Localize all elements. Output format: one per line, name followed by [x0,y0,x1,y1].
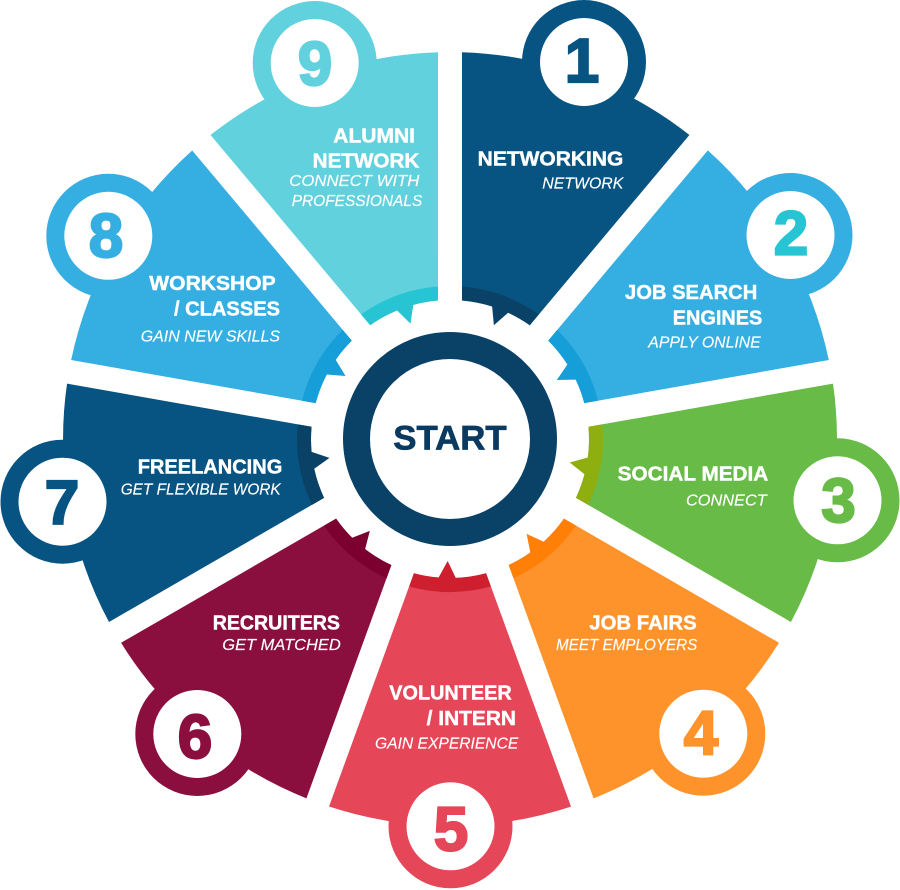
panel: segment 9 alumni network: 9 [298,30,332,99]
panel: segment 5 volunteer intern: / INTERN [427,708,516,730]
panel: segment 9 alumni network [211,0,560,344]
panel: segment 8 workshop classes [46,136,380,407]
panel: segment 1 networking: 1 [565,27,599,96]
center start ring: START [393,419,507,457]
panel: segment 1 networking: NETWORKING [478,149,623,171]
panel: segment 4 job fairs: 4 [684,699,719,768]
panel: segment 4 job fairs: JOB FAIRS [589,612,697,634]
panel: segment 7 freelancing [0,289,345,622]
panel: segment 8 workshop classes: 8 [89,202,123,271]
panel: segment 6 recruiters: 6 [178,703,212,772]
panel: segment 2 job search engines: JOB SEARCH [625,282,757,304]
panel: segment 4 job fairs: MEET EMPLOYERS [556,637,698,654]
panel: segment 7 freelancing: GET FLEXIBLE WORK [121,481,282,498]
panel: segment 6 recruiters: GET MATCHED [222,637,341,654]
panel: segment 1 networking [462,0,689,325]
panel: segment 5 volunteer intern: VOLUNTEER [389,682,512,704]
panel: segment 3 social media [564,384,900,655]
center start ring [356,346,544,532]
panel: segment 9 alumni network: NETWORK [313,151,420,173]
panel: segment 2 job search engines: ENGINES [673,307,762,329]
panel: segment 8 workshop classes: WORKSHOP [149,273,276,295]
panel: segment 9 alumni network: CONNECT WITH [289,173,420,190]
panel: segment 2 job search engines: 2 [774,200,808,269]
panel: segment 8 workshop classes: / CLASSES [174,299,280,321]
panel: segment 2 job search engines [532,150,882,506]
panel: segment 7 freelancing: FREELANCING [138,456,282,478]
panel: segment 6 recruiters [93,464,400,798]
panel: segment 8 workshop classes: GAIN NEW SKILLS [141,329,280,346]
panel: segment 7 freelancing: 7 [45,469,79,538]
panel: segment 5 volunteer intern: 5 [434,796,468,865]
panel: segment 1 networking: NETWORK [542,175,625,192]
panel: segment 6 recruiters: RECRUITERS [213,612,340,634]
panel: segment 4 job fairs [429,506,779,840]
panel: segment 5 volunteer intern: GAIN EXPERIENCE [375,735,519,752]
panel: segment 5 volunteer intern [264,550,571,888]
panel: segment 3 social media: SOCIAL MEDIA [618,464,768,486]
panel: segment 9 alumni network: ALUMNI [333,126,415,148]
panel: segment 3 social media: 3 [821,467,856,536]
panel: segment 2 job search engines: APPLY ONLINE [647,335,761,352]
panel: segment 3 social media: CONNECT [686,493,768,510]
panel: segment 9 alumni network: PROFESSIONALS [292,193,423,210]
